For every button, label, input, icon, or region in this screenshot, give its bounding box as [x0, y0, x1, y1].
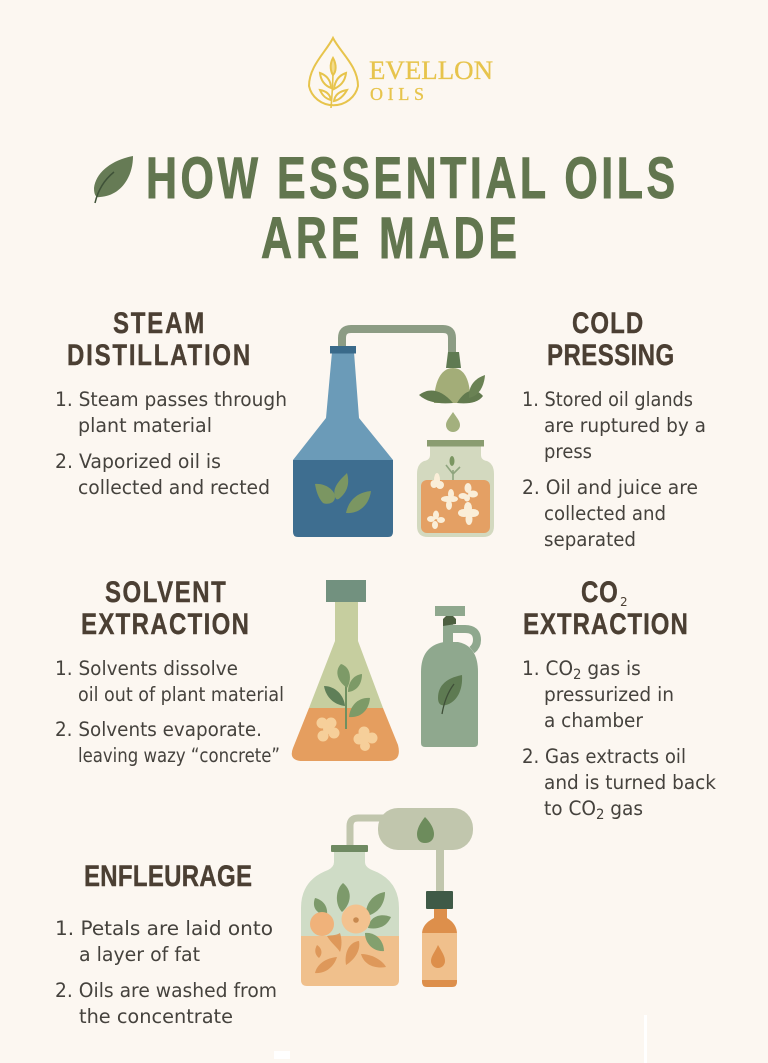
illustration: steam distillation apparatus — [293, 329, 494, 537]
steps: gas — [604, 798, 643, 820]
steps: 1. Stored oil glands — [522, 388, 693, 411]
steps — [522, 388, 706, 551]
steps: separated — [544, 528, 636, 551]
condenser flower — [419, 352, 485, 403]
illustration: solvent flask — [292, 580, 399, 761]
heading: EXTRACTION — [523, 606, 688, 641]
steps: gas is — [581, 658, 641, 680]
steps: pressurized in — [544, 683, 674, 706]
dropper bottle — [422, 891, 457, 987]
heading: STEAM — [113, 305, 204, 340]
steps — [522, 658, 717, 823]
capsule — [378, 808, 473, 850]
steps: 1. Steam passes through — [55, 388, 287, 411]
steps — [55, 917, 277, 1028]
plant — [324, 664, 370, 729]
logo: Evellon Oils — [309, 38, 493, 108]
heading: EXTRACTION — [81, 606, 249, 641]
petals — [315, 933, 386, 973]
heading — [81, 574, 249, 641]
jar — [417, 440, 494, 537]
heading: ENFLEURAGE — [84, 858, 252, 893]
steps: 2 — [573, 667, 581, 683]
panel: steam distillation text — [55, 305, 287, 499]
leaf on jug — [438, 675, 462, 714]
icon: drop with sprig — [309, 38, 358, 108]
drop — [446, 412, 460, 432]
leaves — [314, 883, 391, 951]
steps — [55, 657, 284, 767]
heading — [547, 305, 674, 372]
heading: DISTILLATION — [67, 337, 250, 372]
heading: SOLVENT — [105, 574, 226, 609]
pipe — [350, 818, 385, 846]
steps: plant material — [78, 414, 212, 437]
icon: leaf — [94, 156, 133, 203]
steps: a layer of fat — [79, 943, 200, 966]
heading — [523, 574, 688, 641]
pipe — [342, 329, 452, 354]
steps: and is turned back — [544, 771, 717, 794]
steps: 2. Oils are washed from — [55, 979, 277, 1002]
capsule leaf — [417, 817, 434, 843]
illustration: CO2 jug — [421, 606, 478, 747]
steps: to CO — [544, 798, 596, 820]
title line 1: HOW ESSENTIAL OILS — [146, 146, 675, 211]
flowers — [316, 718, 378, 751]
steps: collected and — [544, 502, 666, 525]
steps: 1. CO — [522, 658, 573, 680]
steps: 1. Solvents dissolve — [55, 657, 238, 680]
pipe to dropper — [436, 850, 444, 892]
steps: a chamber — [544, 709, 644, 732]
heading: CO — [581, 574, 618, 609]
steps: 2. Vaporized oil is — [55, 450, 221, 473]
steps: are ruptured by a — [544, 414, 706, 437]
logo subword: OILS — [370, 84, 424, 104]
steps: press — [544, 440, 592, 463]
heading: 2 — [620, 595, 628, 609]
panel: enfleurage text — [55, 858, 277, 1028]
heading — [67, 305, 250, 372]
steps: 2. Oil and juice are — [522, 476, 698, 499]
heading: PRESSING — [547, 337, 674, 372]
title — [94, 146, 675, 271]
blue bottle — [293, 346, 393, 537]
steps: 2 — [596, 807, 604, 823]
steps: 2. Solvents evaporate. — [55, 718, 262, 741]
logo wordmark: EVELLON — [369, 56, 493, 85]
large bottle — [301, 845, 399, 986]
steps: the concentrate — [79, 1005, 233, 1028]
steps: 1. Petals are laid onto — [55, 917, 273, 940]
illustration: enfleurage apparatus — [301, 808, 473, 987]
panel: cold pressing text — [522, 305, 706, 551]
steps: collected and rected — [78, 476, 270, 499]
steps: 2. Gas extracts oil — [522, 745, 686, 768]
steps: leaving wazy “concrete” — [78, 744, 280, 767]
panel: CO2 extraction text — [522, 574, 717, 823]
drop on label — [431, 945, 445, 968]
heading: COLD — [572, 305, 643, 340]
title line 2: ARE MADE — [261, 206, 517, 271]
steps: oil out of plant material — [78, 683, 284, 706]
panel: solvent extraction text — [55, 574, 284, 767]
fruit — [310, 912, 334, 936]
steps — [55, 388, 287, 499]
